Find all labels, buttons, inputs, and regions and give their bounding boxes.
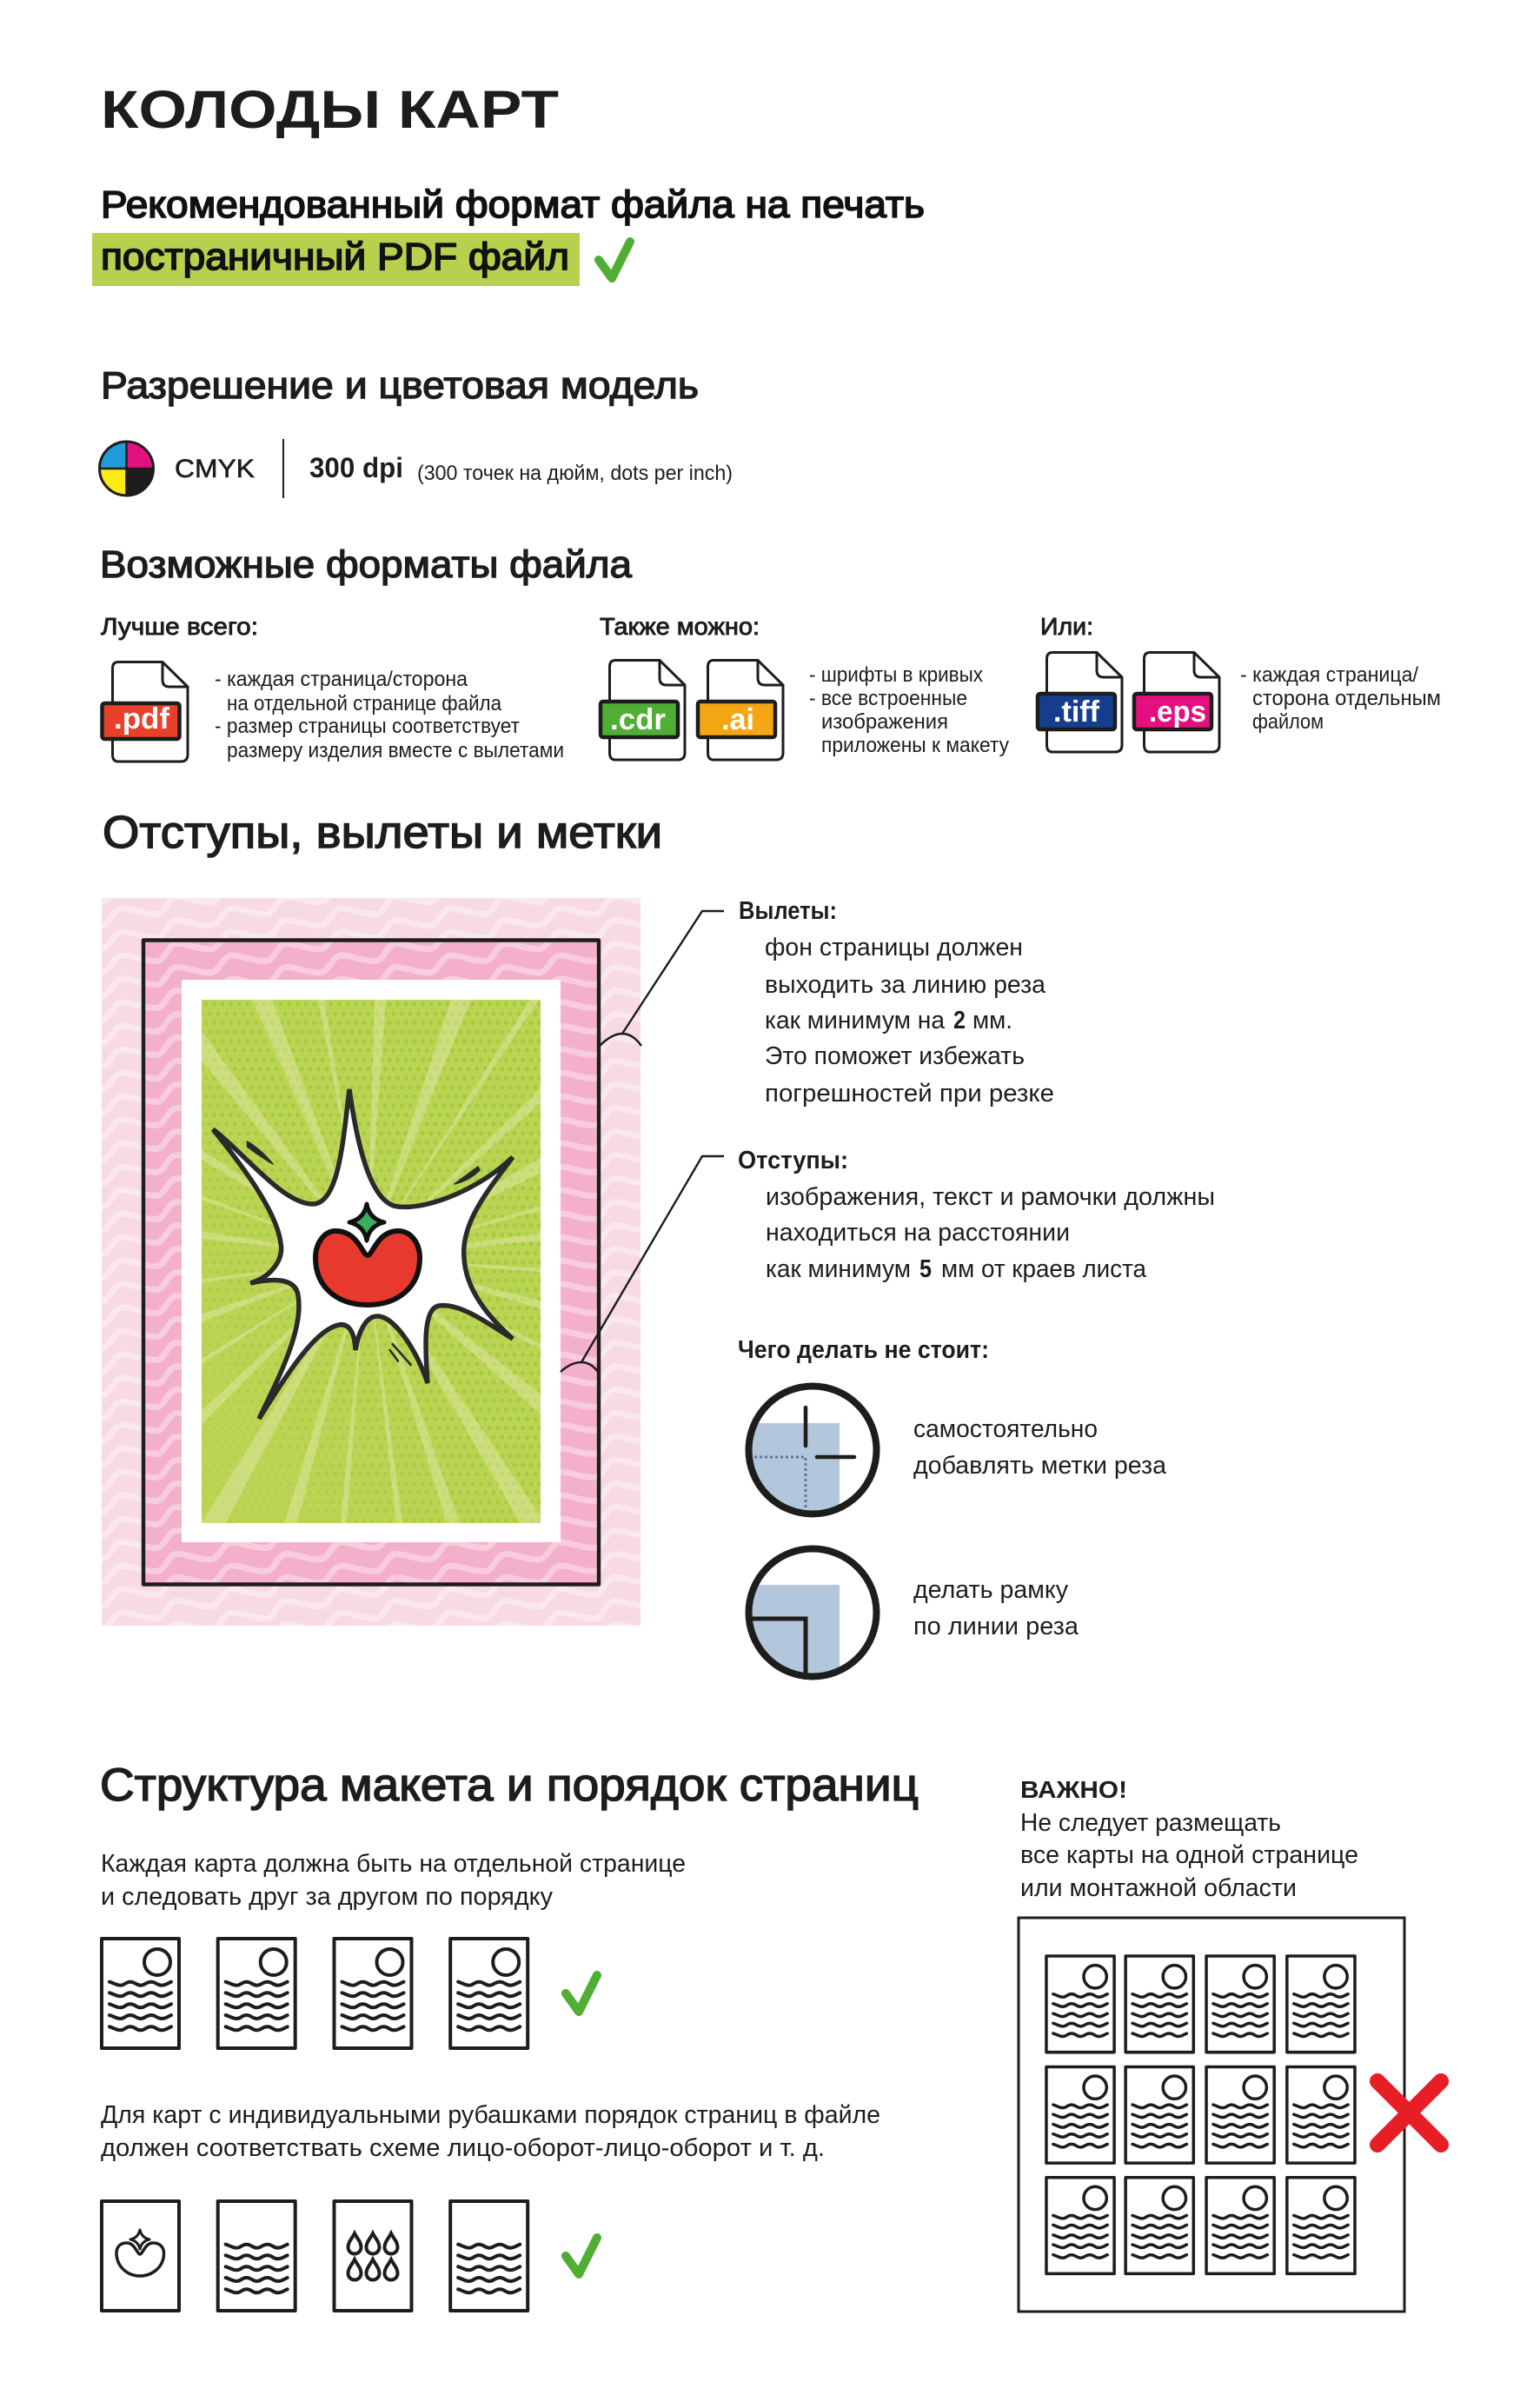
icon: green check (599, 242, 630, 278)
icon: tiff file: .tiff (1053, 695, 1100, 729)
icon: do not frame along cut line (747, 1548, 877, 1680)
text block: margins: 5 (919, 1255, 932, 1283)
text: individual backs order: должен соответствать схеме лицо-оборот-лицо-оборот и т. д. (101, 2134, 825, 2162)
text block: bleeds: выходить за линию реза (765, 971, 1046, 999)
pdf requirements: на отдельной странице файла (227, 692, 502, 715)
icon: check row one (566, 1975, 597, 2012)
resolution value: 300 dpi (309, 452, 403, 483)
cdr ai requirements: - все встроенные (809, 687, 967, 710)
pdf requirements (215, 668, 564, 762)
important label: ВАЖНО! (1020, 1776, 1127, 1803)
icon: cdr file: .cdr (610, 703, 666, 736)
tiff eps requirements: сторона отдельным (1252, 687, 1441, 710)
icon: check row two (566, 2238, 597, 2274)
text block: margins: находиться на расстоянии (766, 1219, 1070, 1247)
callout: bleed pointer (600, 911, 724, 1046)
tiff eps requirements (1240, 663, 1441, 734)
cdr ai requirements: - шрифты в кривых (809, 663, 983, 687)
text block: margins: изображения, текст и рамочки должны (766, 1183, 1215, 1211)
pdf requirements: - каждая страница/сторона (215, 668, 468, 691)
icon: eps file (1134, 652, 1219, 752)
note: frame on cut line: по линии реза (913, 1613, 1079, 1640)
note: crop marks: самостоятельно (913, 1415, 1098, 1443)
margins heading: Отступы: (738, 1147, 848, 1174)
icon: eps file: .eps (1149, 695, 1206, 729)
icon: ai file (698, 661, 783, 760)
note: frame on cut line: делать рамку (913, 1576, 1068, 1604)
row: front and back sequence (102, 2201, 528, 2311)
illustration: card layout with bleed (102, 898, 724, 1626)
callout: margin pointer (561, 1156, 724, 1372)
text block: important warning: все карты на одной странице (1020, 1841, 1358, 1869)
highlighted PDF recommendation: постраничный PDF файл (101, 236, 569, 278)
icon: pdf file: .pdf (114, 702, 170, 735)
subheading: best of all: Лучше всего: (101, 613, 258, 640)
text block: margins: как минимум (766, 1255, 911, 1283)
note: crop marks: добавлять метки реза (913, 1452, 1167, 1480)
resolution note: (300 точек на дюйм, dots per inch) (417, 462, 733, 485)
card: waves back (218, 2201, 295, 2311)
text block: bleeds: как минимум на (765, 1007, 946, 1035)
icon: cdr file (601, 661, 685, 760)
separator line (282, 439, 284, 498)
bleeds heading: Вылеты: (739, 897, 837, 925)
text block: margins: мм от краев листа (941, 1255, 1147, 1283)
cdr ai requirements: изображения (821, 710, 948, 734)
text: each card on separate page: Каждая карта должна быть на отдельной странице (101, 1850, 686, 1878)
icon: CMYK circle (98, 441, 155, 496)
text: individual backs order: Для карт с индивидуальными рубашками порядок страниц в файле (101, 2101, 880, 2129)
heading: what not to do: Чего делать не стоит: (738, 1336, 989, 1364)
title: КОЛОДЫ КАРТ (101, 80, 559, 139)
heading: possible file formats: Возможные форматы файла (100, 543, 633, 586)
text block: bleeds: 2 (953, 1007, 966, 1035)
card: drops front (334, 2201, 412, 2311)
text block: bleeds: мм. (972, 1007, 1012, 1035)
text: each card on separate page (101, 1850, 686, 1911)
panel: wrong imposition sheet (1019, 1918, 1404, 2312)
safe margin (182, 980, 561, 1542)
text block: important warning: или монтажной области (1020, 1874, 1297, 1902)
cdr ai requirements: приложены к макету (821, 734, 1009, 757)
green background with rays (202, 1000, 541, 1523)
text block: important warning: Не следует размещать (1020, 1809, 1281, 1837)
card: tomato front (102, 2201, 179, 2311)
tomato icon (315, 1204, 420, 1305)
tiff eps requirements: файлом (1252, 710, 1324, 734)
cut line (143, 941, 599, 1584)
comic burst (213, 1089, 513, 1419)
bleed area (102, 898, 641, 1626)
note: frame on cut line (913, 1576, 1079, 1640)
row: correct page order (102, 1939, 528, 2048)
heading: margins, bleeds and marks: Отступы, вылеты и метки (103, 808, 662, 858)
subheading: also possible: Также можно: (600, 613, 760, 640)
text block: margins (738, 1147, 1215, 1283)
CMYK label: CMYK (175, 455, 255, 483)
note: crop marks (913, 1415, 1167, 1480)
tiff eps requirements: - каждая страница/ (1240, 663, 1418, 687)
icon: do not add crop marks (747, 1386, 877, 1519)
panel: or tiff eps (1038, 613, 1441, 752)
text block: bleeds: погрешностей при резке (765, 1080, 1054, 1108)
text block: important warning (1020, 1776, 1358, 1902)
text: each card on separate page: и следовать друг за другом по порядку (101, 1883, 553, 1911)
heading: resolution and color model: Разрешение и цветовая модель (101, 364, 699, 407)
text: individual backs order (101, 2101, 880, 2162)
pdf requirements: - размер страницы соответствует (215, 715, 520, 738)
card: waves back two (450, 2201, 528, 2311)
text block: bleeds (739, 897, 1054, 1108)
icon: ai file: .ai (721, 703, 754, 736)
heading: layout structure and page order: Структура макета и порядок страниц (100, 1760, 919, 1811)
text block: bleeds: фон страницы должен (765, 934, 1023, 961)
subheading: or: Или: (1040, 613, 1093, 640)
icon: tiff file (1038, 652, 1122, 752)
panel: also possible cdr ai (600, 613, 1009, 760)
heading: recommended format: Рекомендованный формат файла на печать (101, 183, 925, 226)
icon: red cross (1377, 2081, 1441, 2145)
text block: bleeds: Это поможет избежать (765, 1042, 1025, 1070)
cdr ai requirements (809, 663, 1009, 757)
panel: best format pdf (101, 613, 564, 762)
pdf requirements: размеру изделия вместе с вылетами (227, 739, 564, 762)
icon: pdf file (103, 662, 188, 762)
